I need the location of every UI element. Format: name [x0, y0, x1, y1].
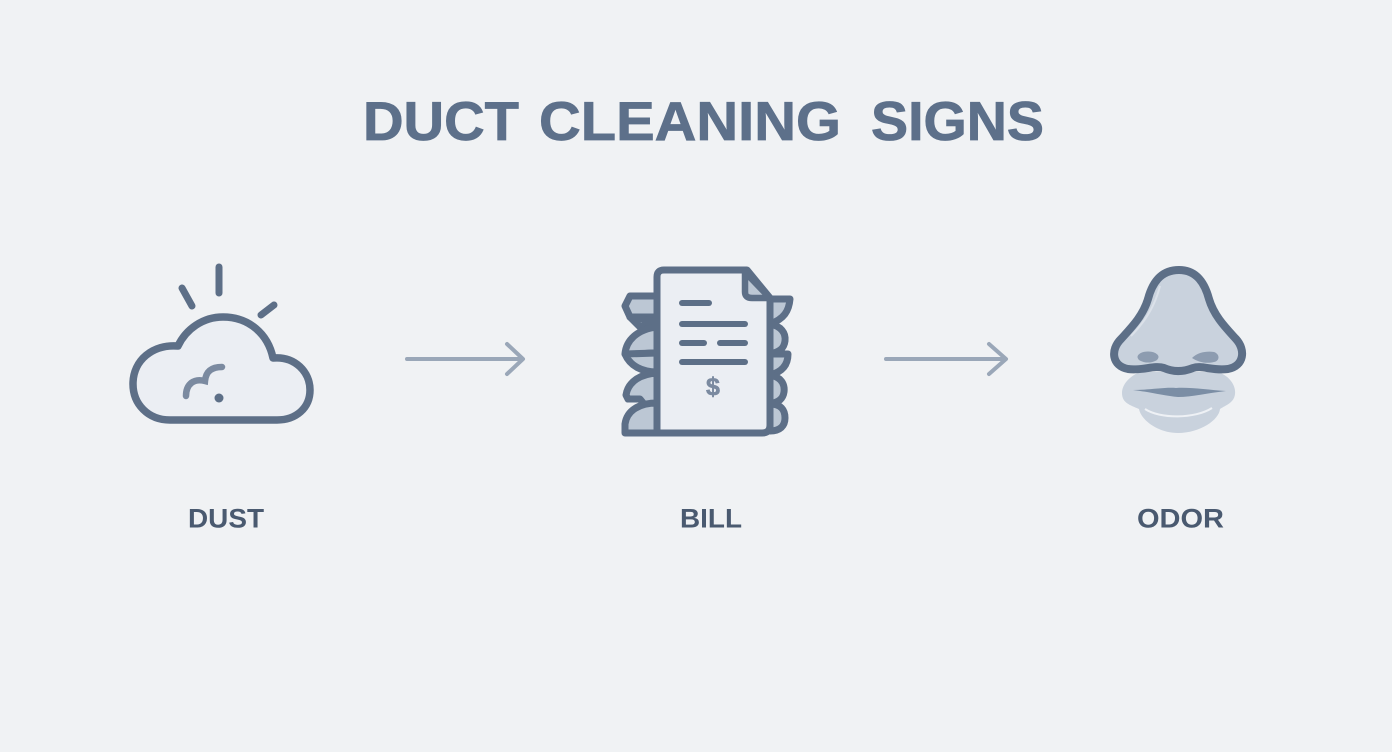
label: odor: ODOR	[1137, 504, 1224, 534]
right page edges	[770, 299, 790, 431]
icon: bill with stacked pages	[625, 270, 790, 433]
dollar sign: $	[706, 373, 720, 401]
document sheet	[657, 270, 770, 433]
icon: nose and mouth	[1114, 270, 1242, 433]
title	[363, 90, 1044, 152]
nostrils	[1138, 352, 1158, 362]
label: bill: BILL	[680, 504, 742, 534]
title: CLEANING	[539, 90, 841, 152]
title: SIGNS	[871, 90, 1044, 152]
bill text lines	[682, 303, 745, 362]
icon: dust cloud	[133, 267, 310, 420]
arrow: bill to odor	[886, 344, 1006, 374]
title: DUCT	[363, 90, 519, 152]
folded corner	[745, 272, 770, 298]
left page edges	[625, 296, 657, 433]
label: dust: DUST	[188, 504, 265, 534]
mouth	[1122, 372, 1235, 433]
nose highlight	[1131, 286, 1160, 336]
arrow: dust to bill	[407, 344, 523, 374]
nose	[1114, 270, 1242, 371]
